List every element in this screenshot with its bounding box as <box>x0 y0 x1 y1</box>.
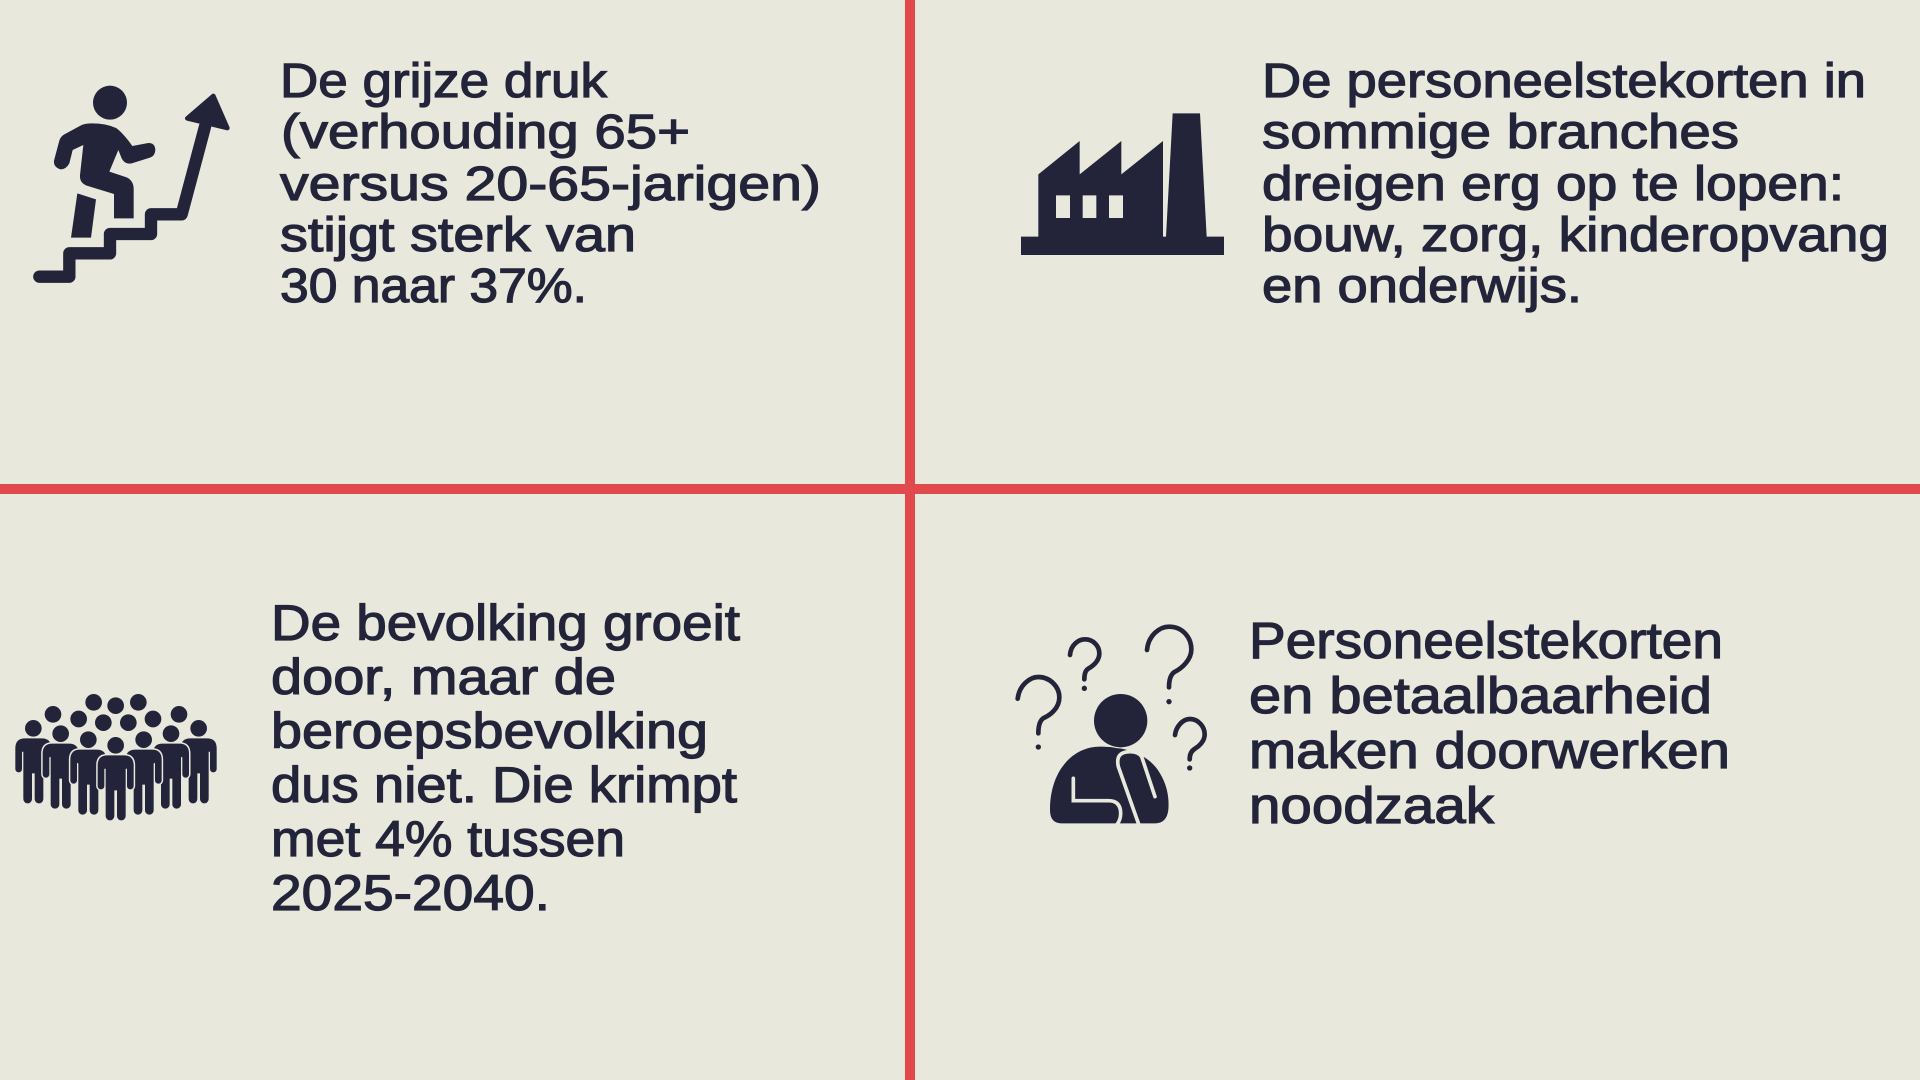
panel: bevolking groeit <box>15 595 740 921</box>
text: bevolking groeit: De bevolking groeit <box>271 595 740 651</box>
text: personeelstekorten in branches: De personeelstekorten in <box>1262 55 1866 108</box>
text: doorwerken noodzaak: maken doorwerken <box>1249 722 1730 779</box>
text: bevolking groeit: met 4% tussen <box>271 811 625 867</box>
text: doorwerken noodzaak <box>1249 612 1730 834</box>
text: personeelstekorten in branches: bouw, zorg, kinderopvang <box>1262 209 1889 262</box>
icon: thinking person with question marks <box>1018 627 1205 826</box>
text: grijze druk: stijgt sterk van <box>280 209 636 262</box>
text: doorwerken noodzaak: en betaalbaarheid <box>1249 667 1712 724</box>
text: bevolking groeit: 2025-2040. <box>271 865 550 921</box>
icon: person climbing stairs with arrow <box>39 86 227 277</box>
icon: crowd of people <box>15 694 217 820</box>
text: bevolking groeit: beroepsbevolking <box>271 703 708 759</box>
panel: grijze druk <box>39 55 821 313</box>
panel: personeelstekorten in branches <box>1021 55 1889 313</box>
text: doorwerken noodzaak: Personeelstekorten <box>1249 612 1723 669</box>
text: grijze druk: (verhouding 65+ <box>281 106 690 159</box>
text: personeelstekorten in branches <box>1262 55 1889 313</box>
text: bevolking groeit: door, maar de <box>271 649 616 705</box>
text: personeelstekorten in branches: en onderwijs. <box>1262 260 1582 313</box>
text: personeelstekorten in branches: sommige branches <box>1262 106 1739 159</box>
text: bevolking groeit <box>271 595 740 921</box>
text: bevolking groeit: dus niet. Die krimpt <box>271 757 737 813</box>
text: grijze druk: 30 naar 37%. <box>280 260 587 313</box>
text: doorwerken noodzaak: noodzaak <box>1249 777 1495 834</box>
text: personeelstekorten in branches: dreigen erg op te lopen: <box>1262 158 1844 211</box>
text: grijze druk: De grijze druk <box>280 55 608 108</box>
icon: factory <box>1021 113 1224 255</box>
text: grijze druk: versus 20-65-jarigen) <box>280 158 821 211</box>
text: grijze druk <box>280 55 821 313</box>
panel: doorwerken noodzaak <box>1018 612 1730 834</box>
